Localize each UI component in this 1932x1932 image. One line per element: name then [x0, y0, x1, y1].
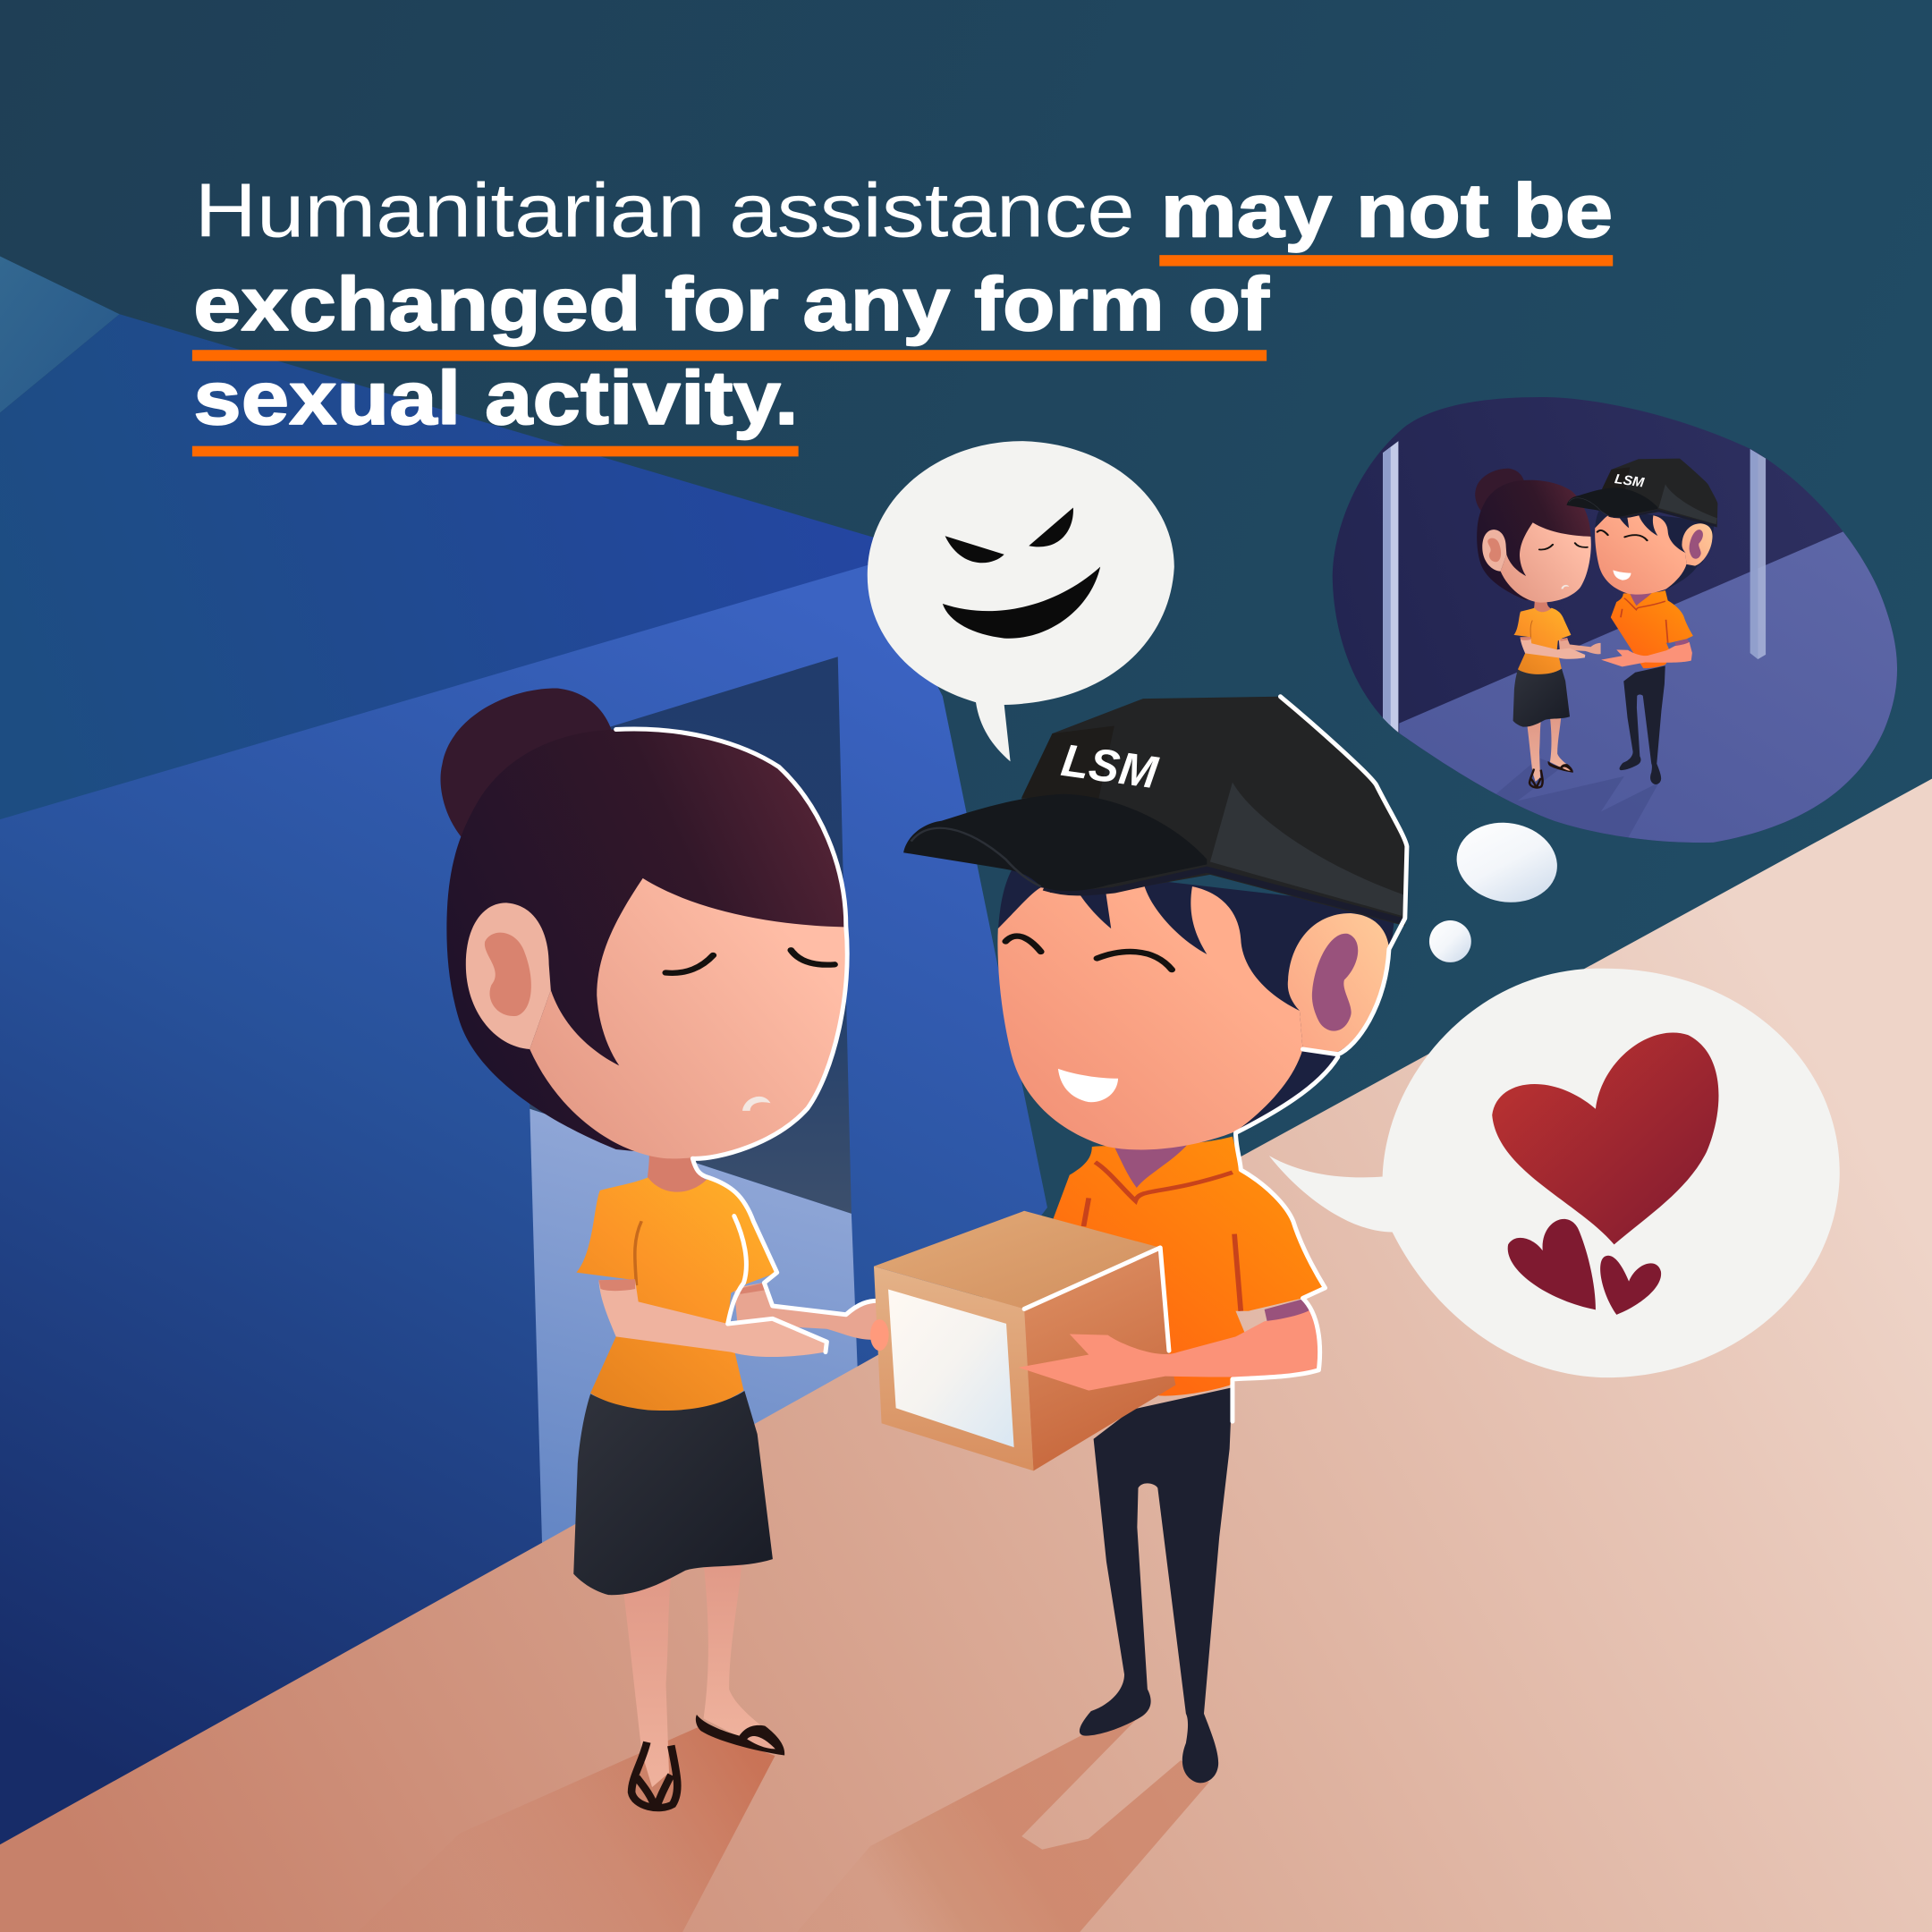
thought puff small [1429, 920, 1471, 962]
woman figure [440, 689, 881, 1809]
cap label: LSM [1058, 734, 1162, 799]
building wall [0, 257, 1047, 1844]
doorway [530, 657, 858, 1546]
title [192, 168, 1613, 456]
mini man [1567, 459, 1717, 784]
floor [0, 779, 1932, 1932]
speech bubble: hearts [1269, 969, 1840, 1377]
man legs [1080, 1387, 1233, 1783]
icon: angry eyes [945, 508, 1073, 563]
title line 3: sexual activity. [193, 356, 799, 440]
title line 1 bold: may not be [1161, 168, 1613, 252]
man torso and head [903, 697, 1407, 1396]
man figure [870, 697, 1407, 1783]
scene backdrop [1333, 397, 1897, 843]
woman upper body and head [440, 689, 881, 1411]
woman outline [616, 729, 878, 1352]
man outline [1233, 697, 1407, 1421]
speech bubble: evil grin [868, 441, 1174, 761]
thought bubble: scene of woman and man [1333, 397, 1897, 843]
floor shadows [357, 1718, 1209, 1932]
title line 1: Humanitarian assistance [195, 168, 1135, 253]
man front arm [1019, 1309, 1322, 1391]
mini cap label: LSM [1614, 471, 1646, 491]
title underlines [192, 255, 1613, 456]
icon: small heart right [1600, 1256, 1661, 1315]
thought puff large [1450, 815, 1563, 911]
icon: small heart left [1508, 1219, 1596, 1309]
icon: grin [943, 567, 1100, 639]
title line 2: exchanged for any form of [193, 262, 1270, 346]
woman lower body [573, 1391, 784, 1809]
mini man arm [1601, 642, 1692, 666]
mini woman [1475, 469, 1601, 788]
parcel box [870, 1211, 1175, 1470]
icon: big heart [1492, 1032, 1718, 1244]
